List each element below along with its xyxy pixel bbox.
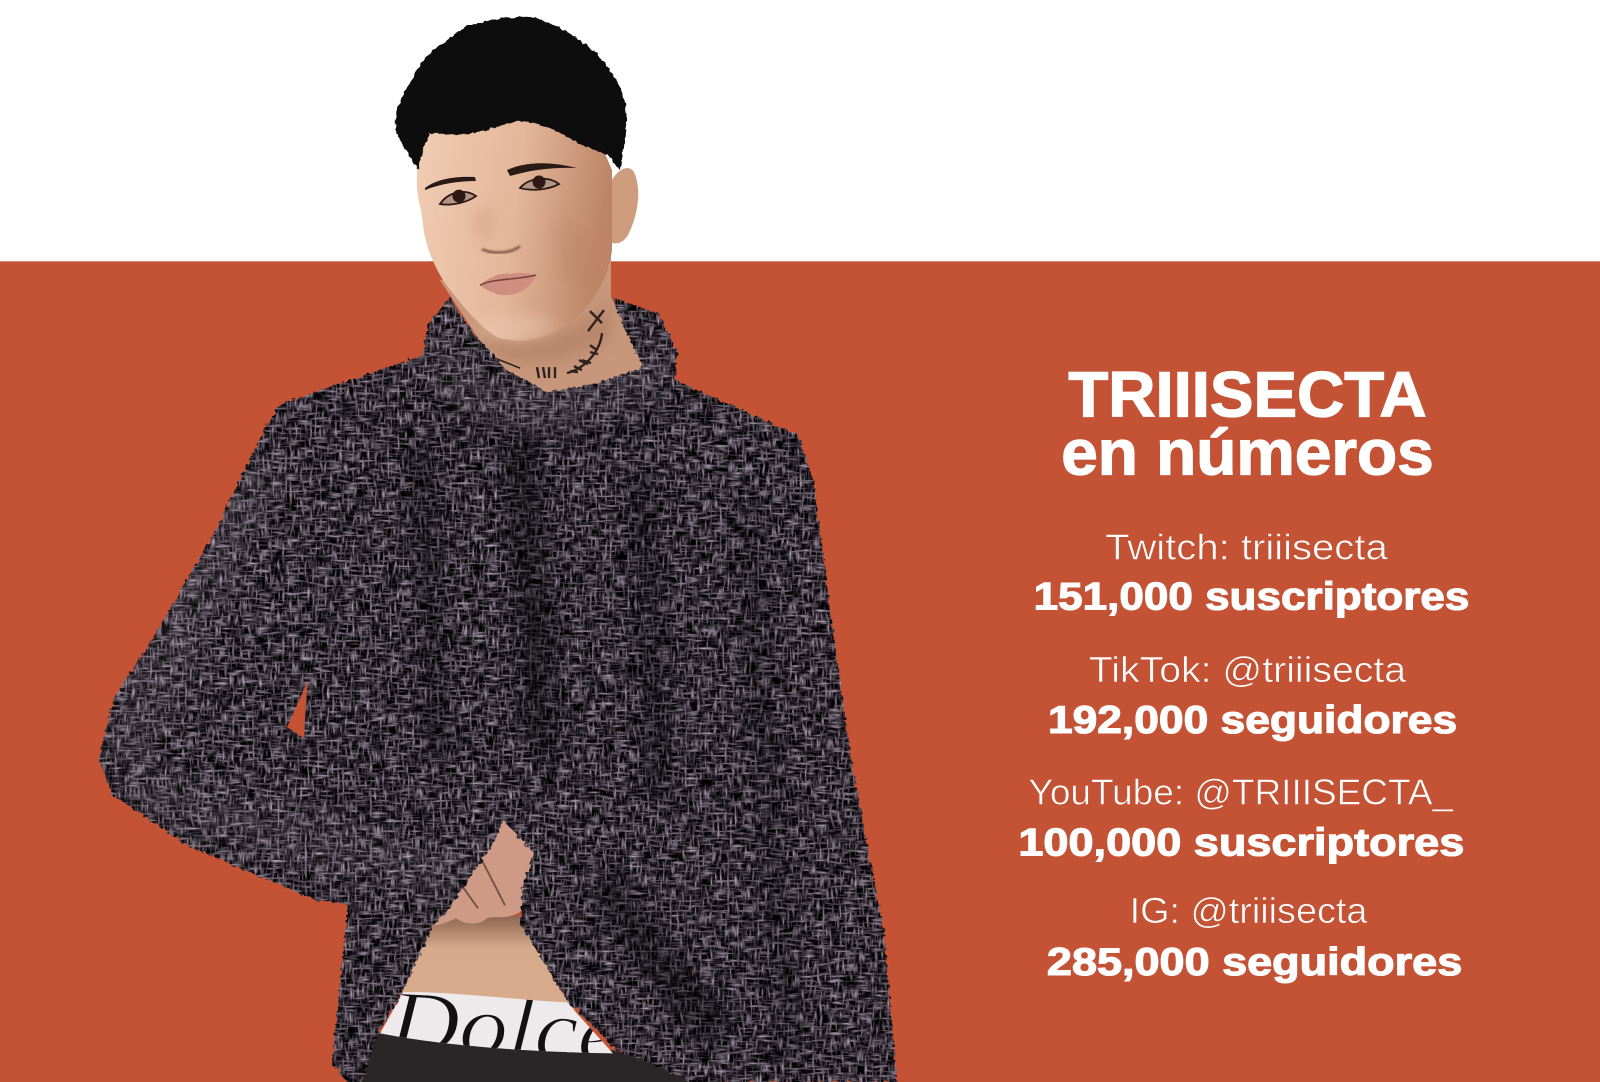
white top background	[0, 0, 1600, 261]
neck tattoo	[495, 310, 604, 378]
stat: Twitch: Twitch: triiisecta	[1105, 527, 1388, 567]
bare midriff	[400, 915, 575, 1010]
hair	[395, 17, 626, 170]
stat: TikTok: TikTok: @triiisecta	[1089, 650, 1406, 690]
lips	[480, 273, 536, 295]
portrait photo of Triiisecta	[99, 17, 897, 1082]
title: TRIIISECTA	[1068, 358, 1427, 430]
stat: TikTok: 192,000 seguidores	[1048, 699, 1457, 742]
stat: Twitch: 151,000 suscriptores	[1034, 575, 1469, 618]
sweater	[99, 297, 897, 1082]
nose	[482, 246, 520, 253]
arm gap	[287, 680, 308, 738]
stat: YouTube	[1018, 772, 1464, 864]
stat: Instagram	[1047, 891, 1462, 984]
eyes	[440, 176, 559, 205]
face	[417, 118, 612, 341]
title: en números	[1061, 417, 1434, 489]
stat: TikTok	[1048, 650, 1457, 742]
stat: YouTube: 100,000 suscriptores	[1018, 821, 1464, 864]
orange background band	[0, 261, 1600, 1082]
ear	[608, 168, 638, 243]
trousers	[355, 1031, 720, 1082]
waistband with logo: Dolce	[386, 973, 624, 1082]
stat: YouTube: YouTube: @TRIIISECTA_	[1029, 772, 1454, 812]
title	[1061, 358, 1434, 489]
neck shadow under jaw	[470, 300, 612, 363]
sweater shading	[120, 340, 790, 1060]
stat: Instagram: IG: @triiisecta	[1130, 891, 1367, 931]
stat: Instagram: 285,000 seguidores	[1047, 941, 1462, 984]
eyebrows	[425, 163, 577, 190]
hand	[434, 815, 545, 925]
stat: Twitch	[1034, 527, 1469, 618]
neck	[440, 240, 650, 400]
waistband with logo	[380, 992, 613, 1054]
cheek and nose shading	[470, 205, 594, 341]
